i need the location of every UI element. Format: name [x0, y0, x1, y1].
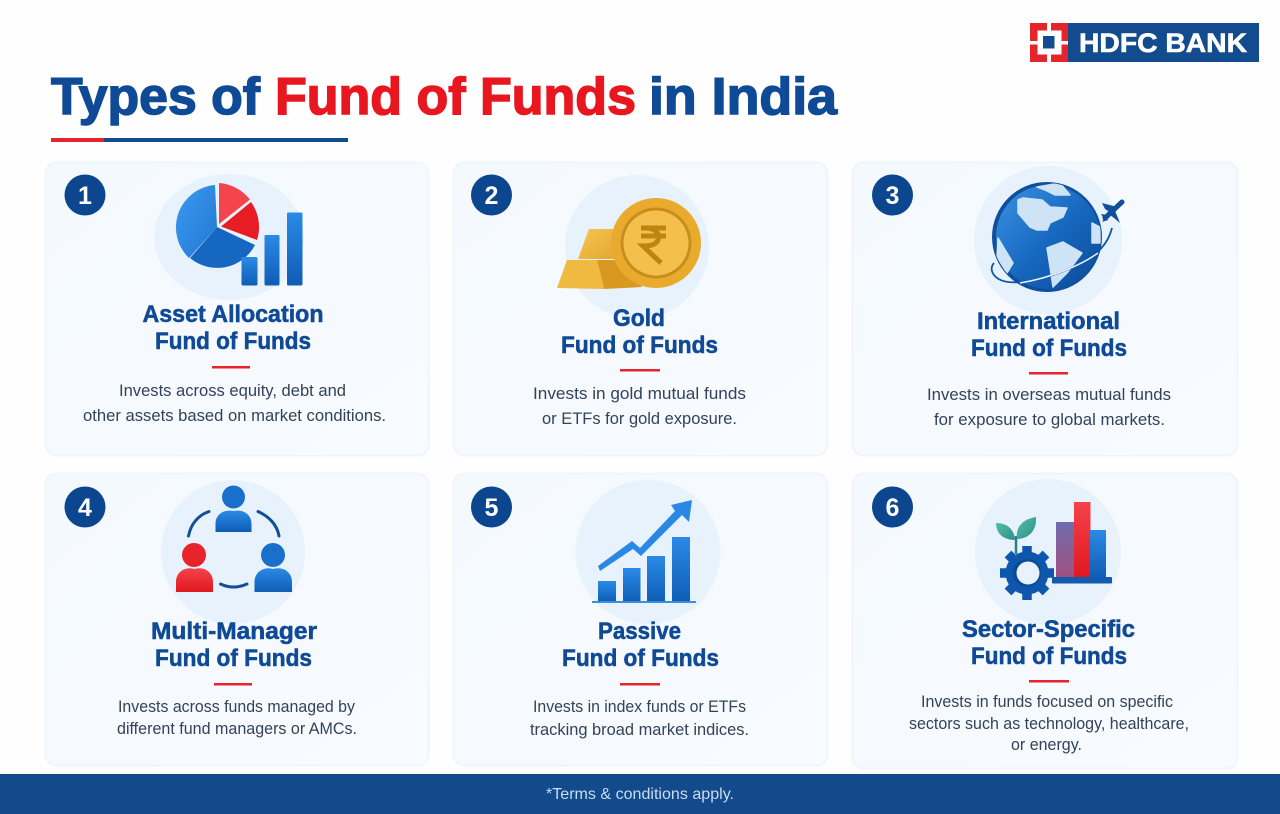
heading	[561, 305, 718, 359]
heading: Fund of Funds	[561, 332, 718, 359]
heading: Sector-Specific	[962, 616, 1135, 643]
heading	[151, 618, 317, 672]
description	[909, 693, 1189, 754]
panel 6: Sector-Specific	[852, 474, 1238, 768]
badge 1	[64, 174, 106, 216]
heading: Multi-Manager	[151, 618, 317, 645]
badge 3	[872, 174, 913, 216]
heading	[962, 616, 1135, 670]
panel 4: Multi-Manager	[46, 474, 428, 766]
badge 2	[471, 174, 512, 216]
badge 2: 2	[485, 182, 498, 210]
description: or ETFs for gold exposure.	[542, 410, 737, 428]
heading: Fund of Funds	[971, 335, 1127, 362]
heading: Fund of Funds	[562, 645, 719, 672]
heading	[562, 618, 719, 672]
badge 4: 4	[78, 494, 92, 522]
badge 6: 6	[886, 494, 899, 522]
badge 6	[872, 486, 913, 528]
heading: Asset Allocation	[142, 301, 324, 328]
panel 1: Asset Allocation	[46, 162, 428, 456]
icon: globe with plane	[974, 166, 1122, 314]
title: in India	[649, 68, 838, 126]
description: sectors such as technology, healthcare,	[909, 715, 1189, 733]
description: Invests in index funds or ETFs	[533, 698, 746, 716]
icon: gear, sprout and bars	[975, 479, 1121, 625]
icon: orbit	[992, 228, 1112, 282]
title	[51, 68, 838, 126]
heading: Fund of Funds	[971, 643, 1127, 670]
heading	[142, 301, 324, 355]
title: Fund of Funds	[275, 68, 636, 126]
footer bar	[0, 774, 1280, 814]
badge 4	[64, 486, 106, 528]
description: tracking broad market indices.	[530, 721, 749, 739]
panel 2: Gold	[454, 162, 828, 456]
description	[927, 386, 1171, 429]
icon: pie chart and bars	[154, 174, 304, 300]
heading: Fund of Funds	[155, 645, 312, 672]
icon: plane	[1101, 202, 1122, 223]
title: Types of	[51, 68, 261, 126]
description: different fund managers or AMCs.	[117, 720, 357, 738]
icon: gear	[1000, 546, 1054, 600]
heading: Fund of Funds	[155, 328, 311, 355]
description: other assets based on market conditions.	[83, 407, 386, 425]
footer bar: *Terms & conditions apply.	[546, 786, 734, 803]
badge 5: 5	[485, 494, 499, 522]
logo: HDFC Bank: HDFC BANK	[1079, 28, 1247, 58]
badge 5	[471, 486, 512, 528]
icon: rising bars and arrow	[576, 480, 720, 624]
description: Invests across equity, debt and	[119, 382, 346, 400]
panel 5: Passive	[454, 474, 828, 766]
heading	[971, 308, 1127, 362]
description: or energy.	[1011, 736, 1082, 754]
icon: gold bars and rupee coin	[557, 175, 709, 319]
description	[117, 698, 357, 738]
panel 3: International	[852, 162, 1238, 456]
description: Invests across funds managed by	[118, 698, 356, 716]
heading: Passive	[598, 618, 681, 645]
badge 3: 3	[886, 182, 899, 210]
icon: three managers in a circle	[161, 480, 305, 624]
description	[530, 698, 749, 739]
icon: rupee sign	[641, 228, 666, 263]
description: Invests in funds focused on specific	[921, 693, 1173, 711]
description: for exposure to global markets.	[934, 411, 1165, 429]
badge 1: 1	[78, 182, 92, 210]
description: Invests in gold mutual funds	[533, 385, 746, 403]
heading: International	[977, 308, 1120, 335]
description	[533, 385, 746, 428]
heading: Gold	[613, 305, 665, 332]
logo: HDFC Bank	[1030, 23, 1259, 62]
title underline	[51, 138, 348, 142]
description	[83, 382, 386, 425]
description: Invests in overseas mutual funds	[927, 386, 1171, 404]
